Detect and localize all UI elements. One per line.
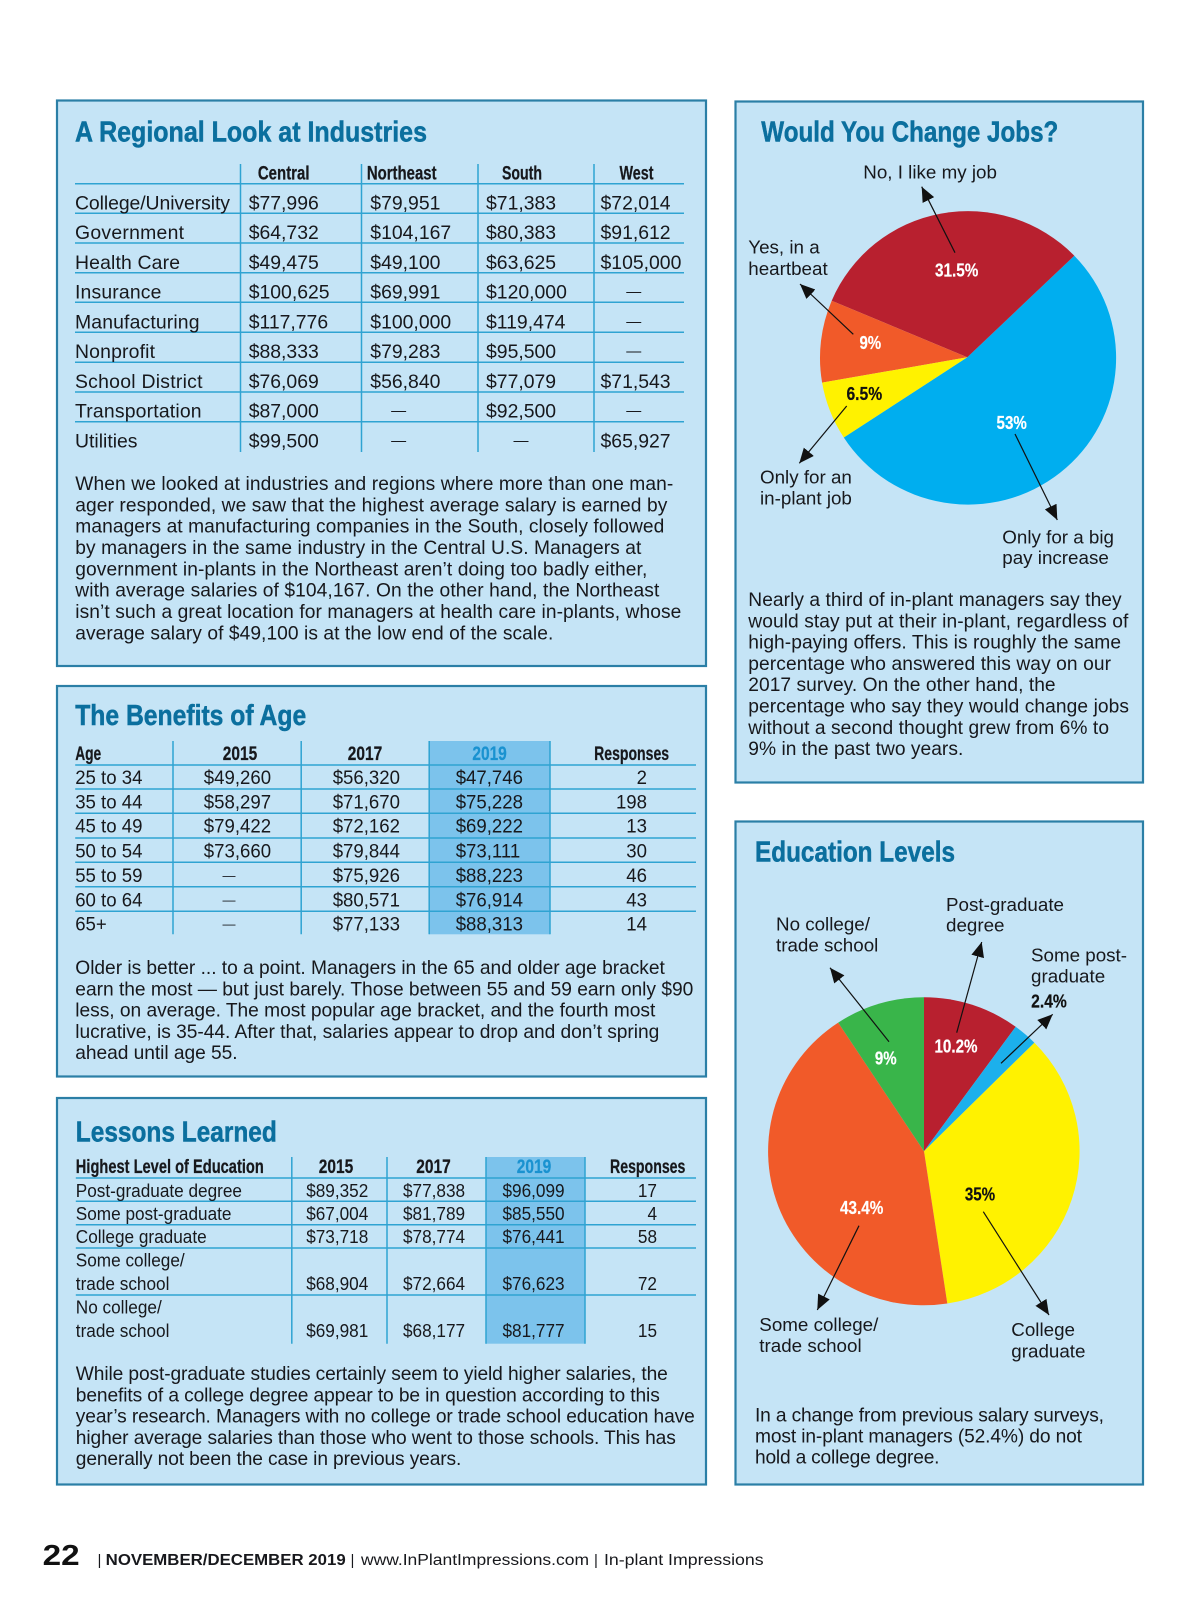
label: some post-graduate 2.4% (1031, 945, 1127, 1011)
pie chart: education levels: 9% (875, 1047, 897, 1068)
table: salary by age: 2015 (223, 744, 258, 765)
table: salary by industry and region: $87,000 (249, 401, 319, 423)
table: salary by industry and region: School District (75, 371, 203, 393)
arrow: only for an in-plant job (799, 406, 847, 463)
table: salary by age: — (222, 892, 236, 908)
arrow: some post-graduate (1001, 1014, 1053, 1063)
pie chart: education levels: 43.4% (840, 1197, 884, 1218)
table: salary by age: $79,422 (204, 816, 271, 838)
text block: age commentary: ahead until age 55. (75, 1043, 238, 1064)
table: salary by education: 72 (638, 1274, 657, 1294)
table: salary by industry and region: Northeast (367, 163, 437, 184)
table: salary by age: $80,571 (333, 890, 400, 912)
label: some post-graduate 2.4%: 2.4% (1031, 990, 1067, 1011)
table: salary by education: trade school (76, 1321, 169, 1341)
table: salary by industry and region: $88,333 (249, 341, 319, 363)
text block: education levels commentary (755, 1406, 1104, 1468)
text block: change jobs commentary: percentage who answered this way on our (748, 654, 1112, 675)
table: salary by education: Post-graduate degree (76, 1181, 242, 1201)
label: some college/trade school: trade school (759, 1335, 862, 1356)
text block: education commentary: higher average salaries than those who went to those schools. This has (76, 1428, 676, 1449)
table: salary by industry and region: $49,100 (370, 252, 441, 274)
table: salary by industry and region: Transportation (75, 401, 202, 423)
text block: regional commentary: ager responded, we saw that the highest average salary is earned by (75, 495, 668, 516)
table: salary by industry and region: — (626, 313, 641, 330)
table: salary by industry and region (75, 163, 684, 452)
table: salary by age: 14 (626, 914, 647, 936)
pie chart: change jobs: 9% (859, 332, 882, 353)
table: salary by education: 58 (638, 1227, 657, 1247)
table: salary by industry and region: Utilities (75, 430, 138, 452)
label: yes, in a heartbeat: heartbeat (748, 258, 828, 279)
table: salary by education (76, 1157, 696, 1344)
table: salary by education: $77,838 (403, 1181, 465, 1201)
text block: age commentary (75, 958, 693, 1064)
table: salary by industry and region: $65,927 (600, 430, 671, 452)
text block: change jobs commentary: 2017 survey. On the other hand, the (748, 675, 1056, 696)
table: salary by industry and region: $117,776 (249, 311, 328, 333)
table: salary by industry and region: $120,000 (486, 282, 567, 304)
table: salary by age: $73,660 (204, 841, 271, 863)
text block: regional commentary: When we looked at industries and regions where more than one man- (75, 474, 673, 495)
table: salary by education: Highest Level of Education (76, 1157, 264, 1178)
text block: education commentary: year’s research. Managers with no college or trade school education have (76, 1407, 695, 1428)
table: salary by industry and region: Manufacturing (75, 311, 200, 333)
table: salary by education: $68,904 (306, 1274, 368, 1294)
table: salary by industry and region: $76,069 (249, 371, 319, 393)
table: salary by industry and region: $72,014 (600, 192, 671, 214)
table: salary by education: College graduate (76, 1227, 207, 1247)
table: salary by age: 43 (626, 890, 647, 912)
table: salary by age: 60 to 64 (75, 890, 143, 912)
label: no college/trade school (776, 914, 878, 956)
table: salary by industry and region: $99,500 (249, 430, 319, 452)
table: salary by education: Some college/ (76, 1250, 185, 1271)
label: yes, in a heartbeat (748, 236, 828, 279)
label: some college/trade school (759, 1314, 879, 1356)
table: salary by age: $75,228 (456, 792, 523, 814)
table: salary by education: 15 (638, 1321, 657, 1341)
table: salary by industry and region: $56,840 (370, 371, 441, 393)
table: salary by education: trade school (76, 1274, 169, 1294)
table: salary by age: $73,111 (456, 841, 520, 863)
table: salary by industry and region: South (502, 163, 542, 184)
pie chart: education levels: 10.2% (934, 1035, 978, 1056)
text block: education commentary (76, 1364, 695, 1470)
table: salary by age: $69,222 (456, 816, 523, 838)
text block: regional commentary: government in-plants in the Northeast aren’t doing too badly either, (75, 559, 647, 580)
table: salary by age: 13 (626, 816, 647, 838)
label: no college/trade school: trade school (776, 935, 878, 956)
table: salary by education: $67,004 (306, 1204, 368, 1224)
table: salary by education: $78,774 (403, 1227, 465, 1247)
table: salary by education: Some post-graduate (76, 1204, 232, 1224)
label: college graduate: College (1011, 1319, 1075, 1340)
heading: the benefits of age: The Benefits of Age (75, 700, 306, 732)
table: salary by age: $76,914 (456, 890, 523, 912)
text block: change jobs commentary: Nearly a third of in-plant managers say they (748, 590, 1122, 611)
table: salary by age: $72,162 (333, 816, 400, 838)
table: salary by industry and region: Central (258, 163, 310, 184)
table: salary by age: $79,844 (333, 841, 400, 863)
table: salary by age: 25 to 34 (75, 768, 143, 789)
table: salary by industry and region: Health Care (75, 252, 180, 274)
table: salary by age: $49,260 (204, 768, 271, 789)
label: post-graduate degree (946, 894, 1064, 936)
table: salary by education: 4 (647, 1204, 657, 1224)
label: college graduate (1011, 1319, 1085, 1361)
text block: regional commentary: with average salaries of $104,167. On the other hand, the Northeast (74, 581, 660, 602)
table: salary by industry and region: $64,732 (249, 222, 319, 244)
label: college graduate: graduate (1011, 1340, 1085, 1361)
table: salary by age: $77,133 (333, 914, 400, 936)
table: salary by age: $88,223 (456, 866, 523, 887)
arrow: some college (817, 1226, 859, 1310)
text block: change jobs commentary: percentage who say they would change jobs (748, 696, 1129, 718)
table: salary by age: 2017 (348, 744, 382, 765)
table: salary by age: 2 (637, 768, 647, 789)
table: salary by education: $69,981 (306, 1321, 368, 1341)
table: salary by age: Responses (594, 744, 669, 765)
pie chart: change jobs: 53% (997, 412, 1027, 433)
table: salary by industry and region: $95,500 (486, 341, 556, 363)
table: salary by industry and region: — (626, 343, 641, 360)
footer: page number and issue line: | (350, 1552, 354, 1569)
table: salary by age: $75,926 (333, 866, 400, 887)
text block: education levels commentary: In a change from previous salary surveys, (755, 1406, 1104, 1427)
table: salary by education: No college/ (76, 1297, 162, 1318)
table: salary by industry and region: $92,500 (486, 401, 556, 423)
footer: page number and issue line: In-plant Impressions (604, 1552, 764, 1569)
text block: regional commentary: isn’t such a great location for managers at health care in-plants, whose (75, 602, 681, 623)
text block: change jobs commentary: without a second thought grew from 6% to (747, 718, 1109, 739)
table: salary by industry and region: — (626, 403, 641, 420)
pie chart: change jobs: 6.5% (846, 383, 883, 404)
table: salary by industry and region: College/University (75, 192, 230, 214)
panel: lessons learned (57, 1098, 706, 1484)
table: salary by age: 198 (616, 792, 647, 814)
text block: education levels commentary: hold a college degree. (755, 1447, 940, 1468)
table: salary by industry and region: $63,625 (486, 252, 556, 274)
table: salary by education: $68,177 (403, 1321, 465, 1341)
text block: regional commentary (74, 474, 681, 644)
table: salary by age: 65+ (75, 914, 107, 936)
label: only for an in-plant job: Only for an (760, 466, 852, 487)
label: only for a big pay increase: pay increase (1002, 547, 1109, 568)
table: salary by industry and region: $80,383 (486, 222, 556, 244)
panel: would you change jobs (736, 102, 1143, 782)
text block: regional commentary: average salary of $49,100 is at the low end of the scale. (75, 623, 553, 644)
table: salary by industry and region: $71,543 (600, 371, 671, 393)
panel: the benefits of age (57, 686, 706, 1076)
table: salary by age: — (222, 917, 236, 932)
text block: age commentary: less, on average. The most popular age bracket, and the fourth most (75, 1001, 656, 1022)
table: salary by age: $71,670 (333, 792, 400, 814)
table: salary by industry and region: $79,951 (370, 192, 440, 214)
text block: age commentary: earn the most — but just barely. Those between 55 and 59 earn only $90 (75, 979, 693, 1000)
table: salary by industry and region: $69,991 (370, 282, 440, 304)
label: some post-graduate 2.4%: graduate (1031, 965, 1105, 986)
text block: change jobs commentary (747, 590, 1129, 760)
table: salary by education: $73,718 (306, 1227, 368, 1247)
footer: page number and issue line: | (98, 1552, 101, 1569)
table: salary by industry and region: Government (75, 222, 185, 244)
label: no, I like my job: No, I like my job (863, 161, 997, 182)
text block: regional commentary: by managers in the same industry in the Central U.S. Managers at (75, 538, 642, 559)
table: salary by age: $56,320 (333, 768, 400, 789)
table: salary by age: 46 (626, 866, 647, 887)
heading: education levels: Education Levels (755, 837, 955, 869)
table: salary by industry and region: $77,996 (249, 192, 319, 214)
table: salary by education: Responses (610, 1157, 685, 1178)
table: salary by industry and region: $91,612 (600, 222, 671, 244)
table: salary by industry and region: $105,000 (600, 252, 682, 274)
arrow: college graduate (983, 1212, 1049, 1315)
table: salary by industry and region: Insurance (75, 282, 161, 304)
table: salary by age: 55 to 59 (75, 866, 142, 887)
label: post-graduate degree: Post-graduate (946, 894, 1064, 915)
table: salary by age: $58,297 (204, 792, 271, 814)
pie chart: education levels (768, 997, 1080, 1305)
table: salary by industry and region: Nonprofit (75, 341, 156, 363)
table: salary by industry and region: — (391, 403, 406, 420)
label: some post-graduate 2.4%: Some post- (1031, 945, 1127, 966)
footer: page number and issue line: | (594, 1552, 598, 1569)
table: salary by education: 2015 (319, 1157, 354, 1178)
table: salary by industry and region: $71,383 (486, 192, 556, 214)
table: salary by education: $76,623 (503, 1274, 565, 1294)
table: salary by age: — (222, 868, 236, 883)
arrow: no, I like my job (922, 187, 955, 253)
table: salary by education: $96,099 (503, 1181, 565, 1201)
table: salary by industry and region: West (620, 163, 654, 184)
label: yes, in a heartbeat: Yes, in a (748, 236, 820, 257)
arrow: no college (830, 968, 889, 1042)
table: salary by industry and region: $119,474 (486, 311, 566, 333)
label: post-graduate degree: degree (946, 915, 1004, 936)
text block: regional commentary: managers at manufacturing companies in the South, closely followed (75, 517, 664, 538)
heading: a regional look at industries: A Regional Look at Industries (75, 117, 427, 149)
text block: education commentary: benefits of a college degree appear to be in question according to this (76, 1385, 660, 1406)
table: salary by industry and region: — (626, 284, 641, 301)
panel: education levels (736, 822, 1143, 1484)
label: only for an in-plant job: in-plant job (760, 487, 852, 508)
table: salary by education: $81,789 (403, 1204, 465, 1224)
table: salary by education: $76,441 (503, 1227, 565, 1247)
table: salary by age: 50 to 54 (75, 841, 143, 863)
table: salary by education: 2019 (517, 1157, 551, 1178)
table: salary by age: 35 to 44 (75, 792, 143, 814)
footer: page number and issue line: 22 (43, 1540, 80, 1572)
text block: change jobs commentary: high-paying offers. This is roughly the same (748, 633, 1121, 654)
table: salary by education: $72,664 (403, 1274, 465, 1294)
table: salary by age: 30 (626, 841, 647, 863)
label: some college/trade school: Some college/ (759, 1314, 879, 1335)
pie chart: education levels: 35% (965, 1184, 996, 1205)
table: salary by age: $88,313 (456, 914, 523, 936)
text block: education commentary: generally not been the case in previous years. (76, 1449, 461, 1470)
footer: page number and issue line: www.InPlantImpressions.com (360, 1552, 589, 1569)
table: salary by education: $85,550 (503, 1204, 565, 1224)
table: salary by industry and region: $104,167 (370, 222, 451, 244)
text block: change jobs commentary: 9% in the past two years. (748, 739, 963, 760)
label: only for an in-plant job (760, 466, 852, 508)
arrow: yes, in a heartbeat (800, 284, 853, 334)
table: salary by age: $47,746 (456, 768, 523, 789)
pie chart: change jobs: 31.5% (935, 260, 979, 281)
table: salary by industry and region: $49,475 (249, 252, 319, 274)
text block: education levels commentary: most in-plant managers (52.4%) do not (755, 1427, 1083, 1448)
heading: lessons learned: Lessons Learned (76, 1117, 277, 1149)
text block: education commentary: While post-graduate studies certainly seem to yield higher salaries, the (76, 1364, 668, 1385)
table: salary by education: 2017 (416, 1157, 451, 1178)
table: salary by age: 2019 (472, 744, 507, 765)
footer: page number and issue line (43, 1540, 764, 1572)
table: salary by industry and region: — (514, 432, 528, 449)
label: only for a big pay increase (1002, 526, 1114, 568)
arrow: post-graduate degree (957, 942, 982, 1033)
label: no college/trade school: No college/ (776, 914, 871, 935)
table: salary by education: $81,777 (503, 1321, 565, 1341)
table: salary by age: Age (75, 744, 101, 765)
table: salary by industry and region: $100,000 (370, 311, 451, 333)
table: salary by education: $89,352 (306, 1181, 368, 1201)
table: salary by education: 17 (638, 1181, 657, 1201)
text block: age commentary: Older is better ... to a point. Managers in the 65 and older age bracket (75, 958, 665, 979)
label: only for a big pay increase: Only for a big (1002, 526, 1114, 547)
table: salary by age: 45 to 49 (75, 816, 142, 838)
table: salary by industry and region: $77,079 (486, 371, 556, 393)
table: salary by age (75, 741, 696, 936)
panel: a regional look at industries (57, 100, 706, 666)
pie chart: change jobs (820, 211, 1116, 505)
table: salary by industry and region: $79,283 (370, 341, 440, 363)
footer: page number and issue line: NOVEMBER/DECEMBER 2019 (106, 1552, 346, 1569)
table: salary by industry and region: — (391, 432, 406, 449)
heading: would you change jobs: Would You Change Jobs? (761, 117, 1058, 149)
table: salary by industry and region: $100,625 (249, 282, 330, 304)
arrow: only for a big pay increase (1015, 434, 1057, 520)
text block: age commentary: lucrative, is 35-44. After that, salaries appear to drop and don’t spring (75, 1022, 659, 1043)
text block: change jobs commentary: would stay put at their in-plant, regardless of (747, 611, 1129, 632)
